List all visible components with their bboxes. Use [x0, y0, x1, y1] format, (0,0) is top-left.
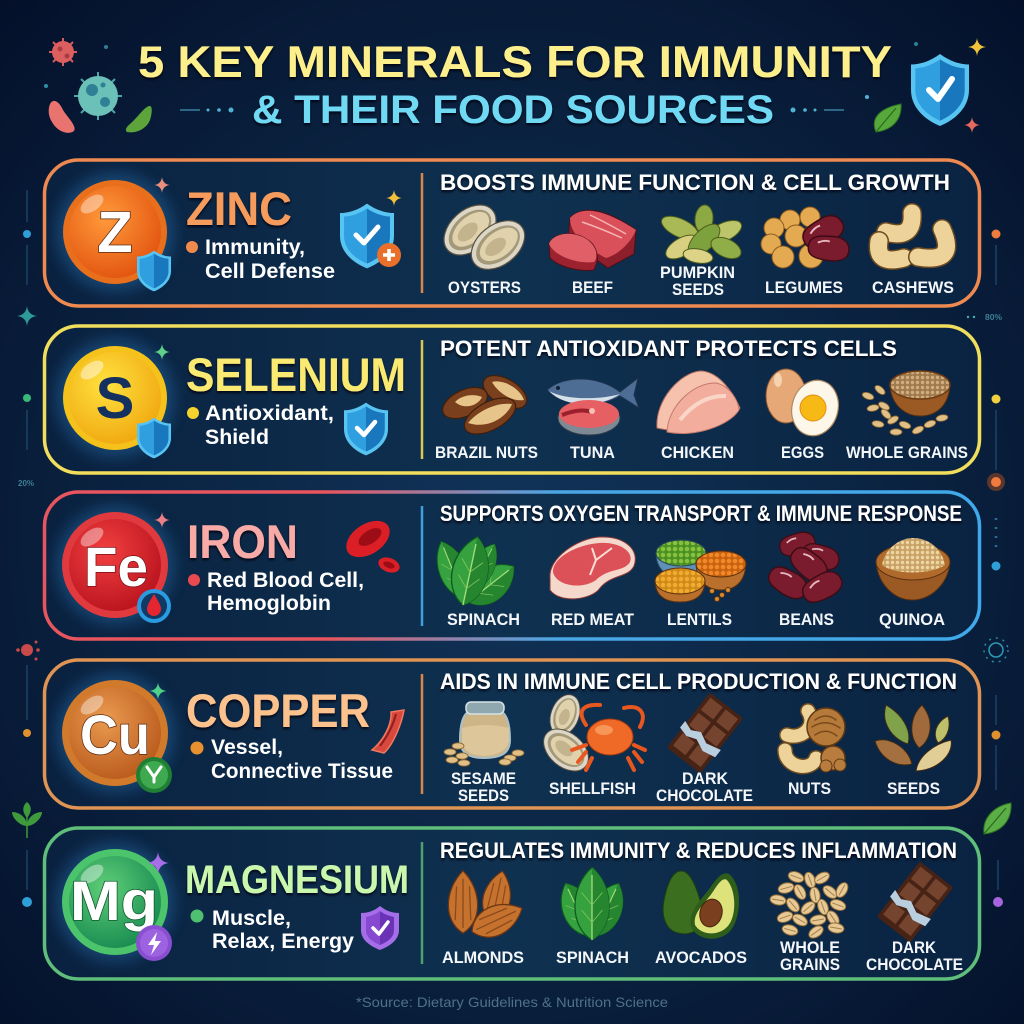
food: spinach [428, 533, 524, 629]
selenium benefits: Antioxidant, [205, 402, 334, 425]
copper heading: AIDS IN IMMUNE CELL PRODUCTION & FUNCTION [440, 669, 957, 694]
panel: selenium [44, 326, 980, 473]
food: sesame seeds [444, 702, 524, 805]
food: chicken: CHICKEN [661, 443, 734, 462]
magnesium badge [55, 842, 175, 962]
selenium benefits: Shield [205, 426, 269, 449]
copper benefits: Connective Tissue [211, 760, 393, 783]
food: eggs: EGGS [781, 443, 824, 462]
food: oysters: OYSTERS [448, 278, 521, 297]
food: tuna: TUNA [570, 443, 615, 462]
zinc benefits: Immunity, [205, 236, 305, 259]
title: 5 KEY MINERALS FOR IMMUNITY [138, 38, 892, 87]
magnesium benefits: Relax, Energy [212, 930, 354, 953]
food: brazil nuts: BRAZIL NUTS [435, 443, 538, 462]
food: dark chocolate [656, 691, 753, 805]
title: & THEIR FOOD SOURCES [252, 88, 774, 132]
food: legumes [761, 207, 850, 297]
food: eggs [766, 369, 844, 462]
food: avocados [655, 871, 747, 967]
food: sesame seeds: SEEDS [458, 786, 509, 805]
magnesium benefits: Muscle, [212, 907, 291, 930]
iron benefits [188, 569, 364, 615]
food: oysters [434, 195, 534, 297]
food: dark chocolate: DARK [682, 769, 729, 788]
copper badge: Cu [80, 703, 150, 766]
magnesium badge: Mg [70, 869, 158, 932]
food: quinoa: QUINOA [879, 610, 945, 629]
food: dark chocolate: DARK [892, 938, 937, 957]
food: shellfish [536, 690, 645, 798]
food: avocados: AVOCADOS [655, 948, 747, 967]
copper badge [55, 673, 175, 793]
food: shellfish: SHELLFISH [549, 779, 636, 798]
icon: red blood cells [340, 513, 402, 575]
selenium badge [55, 338, 175, 458]
food: almonds: ALMONDS [442, 948, 524, 967]
copper name: COPPER [186, 684, 370, 737]
subtitle ornaments [180, 108, 844, 112]
food: beans: BEANS [779, 610, 834, 629]
iron badge [55, 505, 175, 625]
food: red meat [550, 537, 635, 629]
iron benefits: Red Blood Cell, [207, 569, 364, 592]
food: spinach: SPINACH [556, 948, 629, 967]
iron benefits: Hemoglobin [207, 592, 331, 615]
food: sesame seeds: SESAME [451, 769, 516, 788]
food: pumpkin seeds: SEEDS [672, 280, 724, 299]
food: whole grains oats [769, 870, 850, 974]
zinc badge: Z [97, 200, 133, 265]
iron name: IRON [187, 515, 298, 568]
food: legumes: LEGUMES [765, 278, 843, 297]
magnesium heading: REGULATES IMMUNITY & REDUCES INFLAMMATION [440, 838, 957, 863]
food: seeds [875, 705, 951, 798]
food: beans [764, 527, 846, 629]
food: seeds: SEEDS [887, 779, 940, 798]
food: spinach [552, 868, 632, 967]
food: almonds [442, 868, 528, 967]
selenium shield icon [344, 403, 388, 455]
food: dark chocolate [866, 860, 963, 974]
zinc name: ZINC [186, 182, 292, 235]
icon: right leaf [984, 803, 1011, 834]
food: pumpkin seeds [658, 204, 745, 299]
food: whole grains oats: WHOLE [780, 938, 840, 957]
food: brazil nuts [435, 369, 538, 462]
copper benefits [190, 736, 393, 783]
food: whole grains [846, 371, 968, 462]
selenium heading: POTENT ANTIOXIDANT PROTECTS CELLS [440, 336, 897, 361]
food: whole grains: WHOLE GRAINS [846, 443, 968, 462]
icon: left herb sprig [12, 802, 42, 838]
zinc benefits: Cell Defense [205, 260, 335, 283]
food: cashews [872, 213, 954, 297]
panel: iron [44, 492, 980, 639]
source note: *Source: Dietary Guidelines & Nutrition Science [356, 994, 668, 1010]
magnesium name: MAGNESIUM [185, 858, 409, 902]
food: pumpkin seeds: PUMPKIN [660, 263, 735, 282]
food: nuts: NUTS [788, 779, 831, 798]
zinc heading: BOOSTS IMMUNE FUNCTION & CELL GROWTH [440, 170, 950, 195]
header illustrations: pathogens [44, 38, 152, 133]
food: lentils: LENTILS [667, 610, 732, 629]
panel: zinc [44, 160, 980, 306]
food: nuts [785, 708, 846, 798]
food: tuna [547, 378, 639, 462]
food: dark chocolate: CHOCOLATE [656, 786, 753, 805]
selenium benefits [187, 402, 334, 449]
side decorations: 20% [18, 479, 34, 488]
food: dark chocolate: CHOCOLATE [866, 955, 963, 974]
food: lentils [655, 540, 746, 629]
iron badge: Fe [84, 535, 148, 598]
food: quinoa [876, 538, 950, 629]
panel: copper [44, 660, 980, 808]
food: cashews: CASHEWS [872, 278, 954, 297]
title [138, 38, 892, 132]
side decorations [16, 190, 1008, 907]
food: beef [549, 210, 636, 297]
food: whole grains oats: GRAINS [780, 955, 840, 974]
magnesium benefits [190, 907, 354, 953]
copper benefits: Vessel, [211, 736, 283, 759]
panel: magnesium [44, 828, 980, 979]
selenium badge: S [96, 366, 134, 431]
food: red meat: RED MEAT [551, 610, 635, 629]
zinc shield icon [340, 190, 402, 268]
food: beef: BEEF [572, 278, 613, 297]
food: chicken [657, 371, 740, 462]
food: spinach: SPINACH [447, 610, 520, 629]
magnesium shield icon [361, 906, 399, 950]
icon: blood vessel [372, 710, 404, 753]
selenium name: SELENIUM [186, 348, 406, 401]
zinc badge [55, 172, 175, 292]
side decorations: 80% [985, 312, 1002, 322]
zinc benefits [186, 236, 335, 283]
header illustrations: shield, leaf, sparkles [865, 38, 986, 133]
